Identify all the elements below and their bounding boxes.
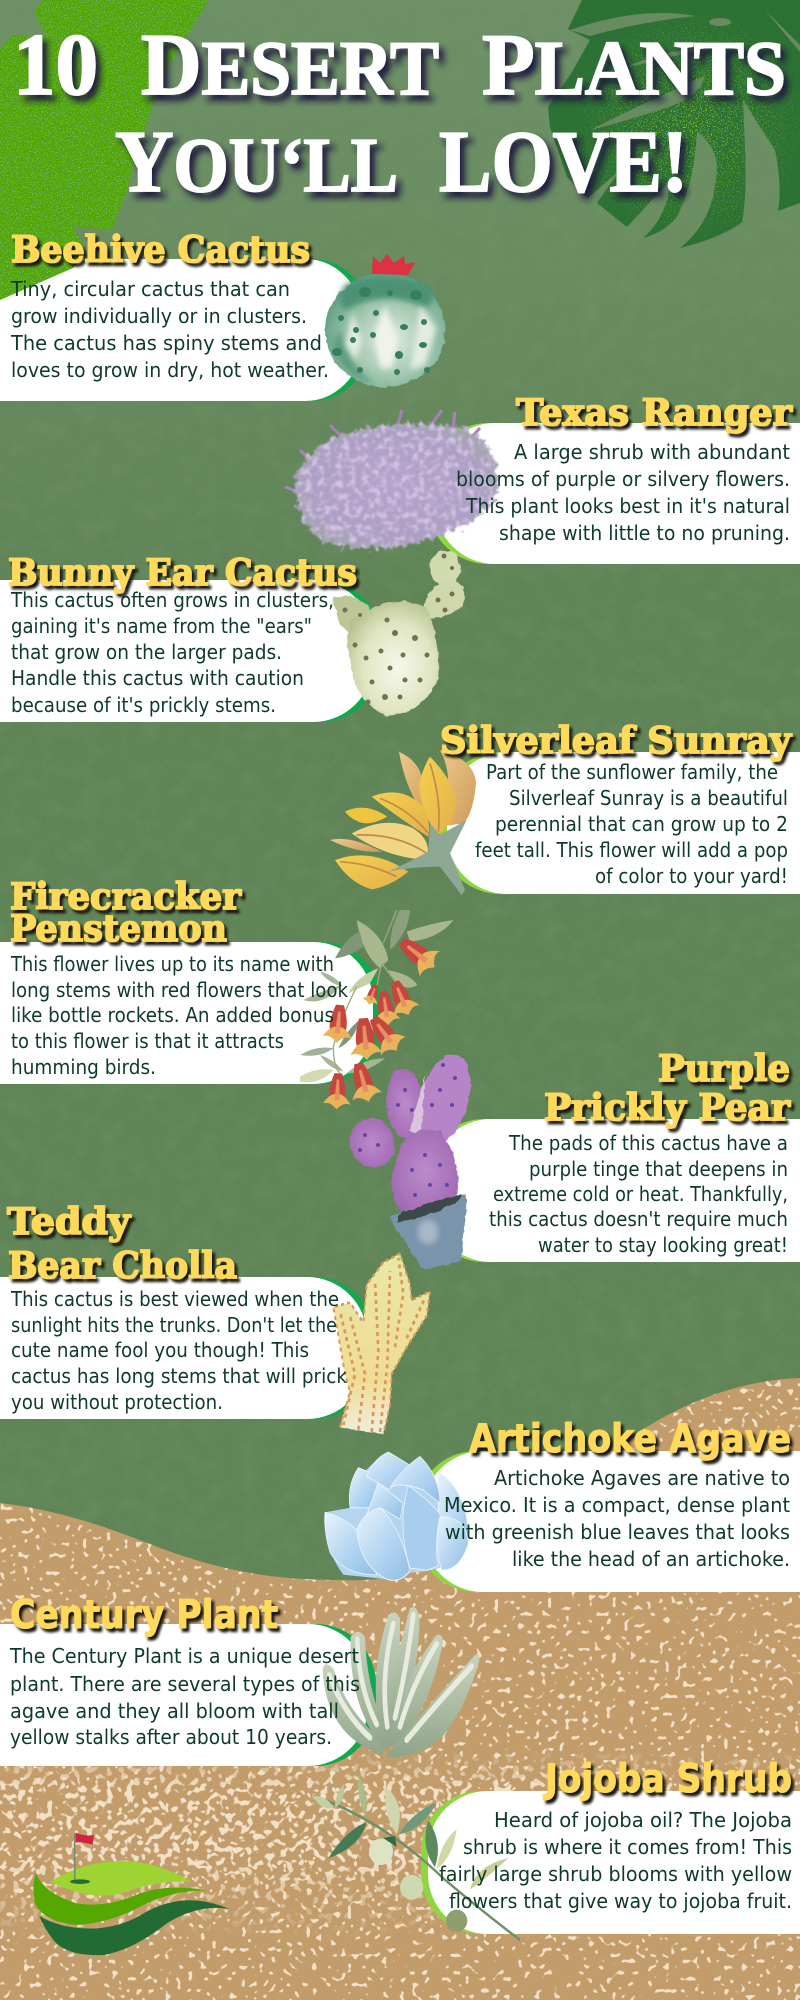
- card: [0, 942, 381, 1084]
- description: [10, 277, 329, 382]
- description: long stems with red flowers that look: [11, 978, 348, 1002]
- description: shape with little to no pruning.: [499, 521, 790, 545]
- icon: bunny ear cactus: [332, 550, 465, 716]
- description: [456, 440, 790, 545]
- icon: silverleaf sunray flower: [330, 750, 476, 895]
- heading: Silverleaf Sunray: [440, 720, 792, 762]
- description: [9, 1644, 360, 1749]
- description: blooms of purple or silvery flowers.: [456, 467, 790, 491]
- description: [475, 760, 788, 888]
- heading: Bunny Ear Cactus: [8, 552, 357, 594]
- card: [0, 580, 381, 722]
- description: cactus has long stems that will prick: [11, 1364, 347, 1388]
- description: [10, 952, 348, 1079]
- description: yellow stalks after about 10 years.: [10, 1725, 332, 1749]
- card: [428, 423, 800, 564]
- panel: Texas Ranger: [285, 392, 800, 564]
- description: Mexico. It is a compact, dense plant: [444, 1493, 790, 1517]
- description: [439, 1808, 792, 1913]
- icon: century plant: [323, 1607, 479, 1757]
- background: tan desert wave with dotted pattern: [0, 1370, 800, 2000]
- description: fairly large shrub blooms with yellow: [439, 1862, 792, 1886]
- title: 10: [13, 17, 98, 114]
- icon: beehive cactus: [325, 254, 445, 387]
- panel: Beehive Cactus: [0, 229, 445, 401]
- description: agave and they all bloom with tall: [10, 1699, 339, 1723]
- description: Heard of jojoba oil? The Jojoba: [494, 1808, 792, 1832]
- description: that grow on the larger pads.: [11, 640, 282, 664]
- icon: purple prickly pear in pot: [343, 1048, 480, 1269]
- card: [424, 1119, 800, 1262]
- description: plant. There are several types of this: [10, 1672, 360, 1696]
- title: YOU‘LL: [115, 114, 398, 211]
- description: you without protection.: [11, 1390, 223, 1414]
- description: Handle this cactus with caution: [11, 666, 304, 690]
- description: because of it's prickly stems.: [11, 693, 276, 717]
- icon: texas ranger shrub: [285, 410, 497, 549]
- panel: Bunny Ear Cactus: [0, 550, 465, 722]
- panel: Silverleaf Sunray: [330, 720, 800, 895]
- description: The cactus has spiny stems and: [10, 331, 322, 355]
- card: [416, 1451, 800, 1592]
- heading: [10, 876, 242, 950]
- description: grow individually or in clusters.: [11, 304, 307, 328]
- description: [10, 1287, 347, 1414]
- icon: artichoke agave: [325, 1452, 468, 1581]
- description: cute name fool you though! This: [11, 1338, 309, 1362]
- card: [0, 1624, 376, 1766]
- decorative monstera leaf, top right: [540, 0, 800, 260]
- card: [0, 1277, 375, 1419]
- panel: Century Plant: [0, 1593, 479, 1766]
- card: [421, 1791, 800, 1934]
- description: sunlight hits the trunks. Don't let the: [11, 1313, 337, 1337]
- description: A large shrub with abundant: [514, 440, 790, 464]
- title: DESERT: [141, 17, 439, 114]
- icon: firecracker penstemon: [300, 910, 453, 1110]
- panel: Firecracker Penstemon: [0, 876, 453, 1110]
- description: with greenish blue leaves that looks: [445, 1520, 790, 1544]
- heading: Texas Ranger: [516, 392, 793, 434]
- panel: Artichoke Agave: [325, 1417, 800, 1592]
- heading: Century Plant: [10, 1593, 278, 1638]
- panel: Purple Prickly Pear: [343, 1048, 800, 1269]
- description: This flower lives up to its name with: [10, 952, 334, 976]
- heading: Purple: [658, 1048, 790, 1090]
- description: loves to grow in dry, hot weather.: [11, 358, 329, 382]
- description: to this flower is that it attracts: [11, 1029, 284, 1053]
- description: [489, 1131, 788, 1257]
- logo: golf green with flag: [33, 1833, 230, 1955]
- description: The Century Plant is a unique desert: [9, 1644, 359, 1668]
- description: Artichoke Agaves are native to: [494, 1466, 790, 1490]
- heading: Prickly Pear: [544, 1087, 791, 1129]
- title: LOVE!: [439, 114, 688, 211]
- heading: Firecracker: [10, 876, 242, 918]
- icon: jojoba shrub: [313, 1776, 520, 1940]
- description: Part of the sunflower family, the: [486, 760, 778, 784]
- icon: teddy bear cholla: [333, 1253, 430, 1434]
- card: [0, 259, 374, 401]
- description: This cactus often grows in clusters,: [10, 588, 334, 612]
- heading: Teddy: [7, 1201, 131, 1243]
- description: [444, 1466, 790, 1571]
- description: shrub is where it comes from! This: [463, 1835, 792, 1859]
- heading: Bear Cholla: [8, 1245, 237, 1287]
- decorative bright green leaf, top left: [0, 0, 215, 305]
- description: gaining it's name from the "ears": [11, 614, 312, 638]
- heading: [544, 1048, 791, 1129]
- description: like bottle rockets. An added bonus: [11, 1003, 334, 1027]
- panel: Jojoba Shrub: [313, 1757, 800, 1940]
- title: PLANTS: [482, 17, 786, 114]
- title: [13, 17, 786, 211]
- card: [440, 752, 800, 894]
- description: like the head of an artichoke.: [512, 1547, 790, 1571]
- heading: Beehive Cactus: [11, 229, 310, 271]
- description: humming birds.: [11, 1055, 156, 1079]
- heading: [7, 1201, 237, 1287]
- panel: Teddy Bear Cholla: [0, 1201, 430, 1434]
- description: Tiny, circular cactus that can: [10, 277, 290, 301]
- heading: Penstemon: [10, 908, 227, 950]
- description: [10, 588, 334, 717]
- description: This cactus is best viewed when the: [10, 1287, 339, 1311]
